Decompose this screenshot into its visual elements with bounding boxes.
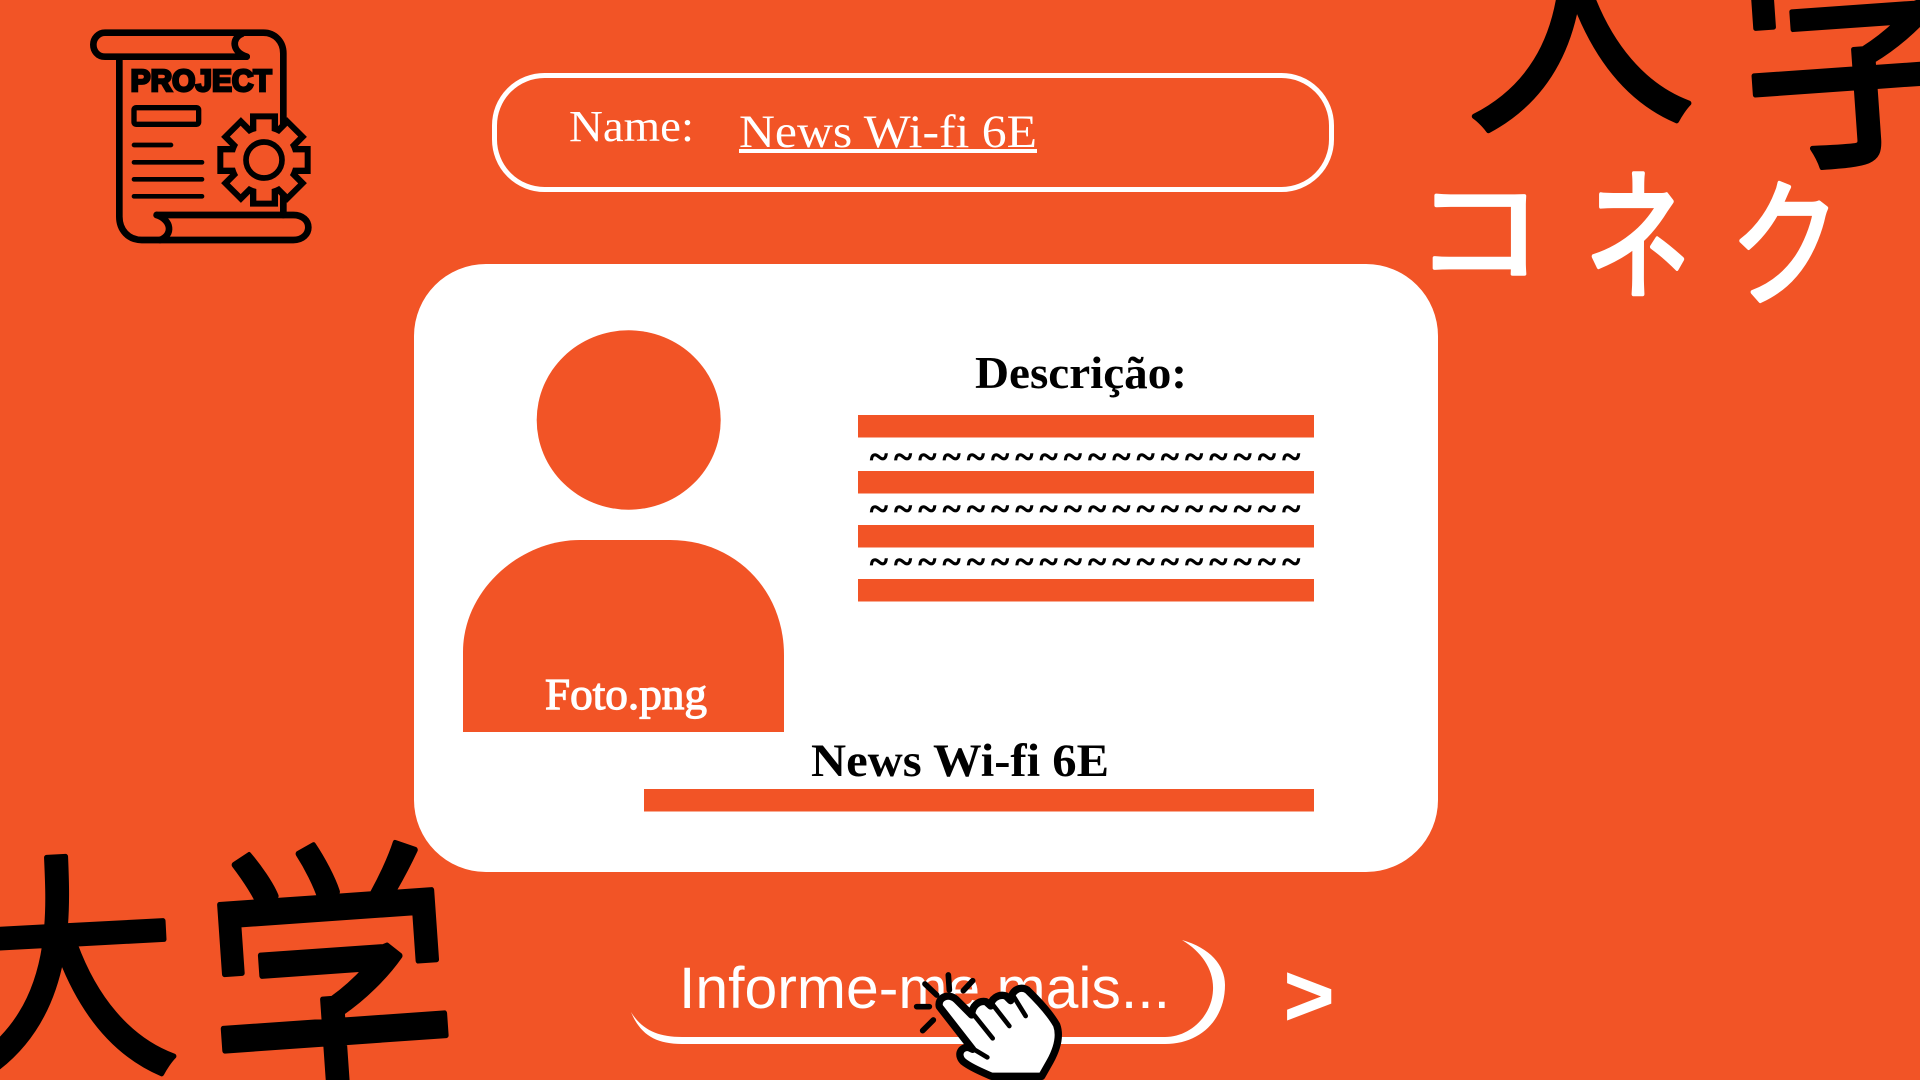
button: informe-me mais: Informe-me mais... xyxy=(679,956,1170,1021)
icon: profile photo placeholder: Foto.png xyxy=(545,670,707,719)
handwritten katakana: ク xyxy=(1730,169,1841,325)
handwritten kanji bottom left xyxy=(0,817,469,1080)
description lines: ~~~~~~~~~~~~~~~~~~ xyxy=(870,491,1300,528)
handwritten katakana: コ xyxy=(1414,171,1544,297)
panel: profile card xyxy=(414,264,1438,872)
description lines: ~~~~~~~~~~~~~~~~~~ xyxy=(870,439,1300,476)
name field: News Wi-fi 6E xyxy=(739,106,1037,158)
name field xyxy=(494,76,1332,190)
icon: project scroll with gear xyxy=(93,33,311,240)
arrow: next: > xyxy=(1284,948,1334,1044)
handwritten kanji top right xyxy=(1453,0,1920,209)
description lines: ~~~~~~~~~~~~~~~~~~ xyxy=(870,544,1300,581)
icon: clicking hand xyxy=(917,975,1058,1076)
handwritten katakana: ネ xyxy=(1585,158,1690,319)
button: informe-me mais xyxy=(631,940,1225,1044)
icon: project scroll with gear: PROJECT xyxy=(131,64,272,98)
profile name: News Wi-fi 6E xyxy=(811,735,1109,787)
profile name xyxy=(644,735,1314,812)
handwritten katakana xyxy=(1414,158,1841,325)
description lines xyxy=(858,415,1314,602)
name field: Name: xyxy=(569,102,694,151)
heading: description: Descrição: xyxy=(975,347,1187,398)
icon: profile photo placeholder xyxy=(463,330,784,732)
